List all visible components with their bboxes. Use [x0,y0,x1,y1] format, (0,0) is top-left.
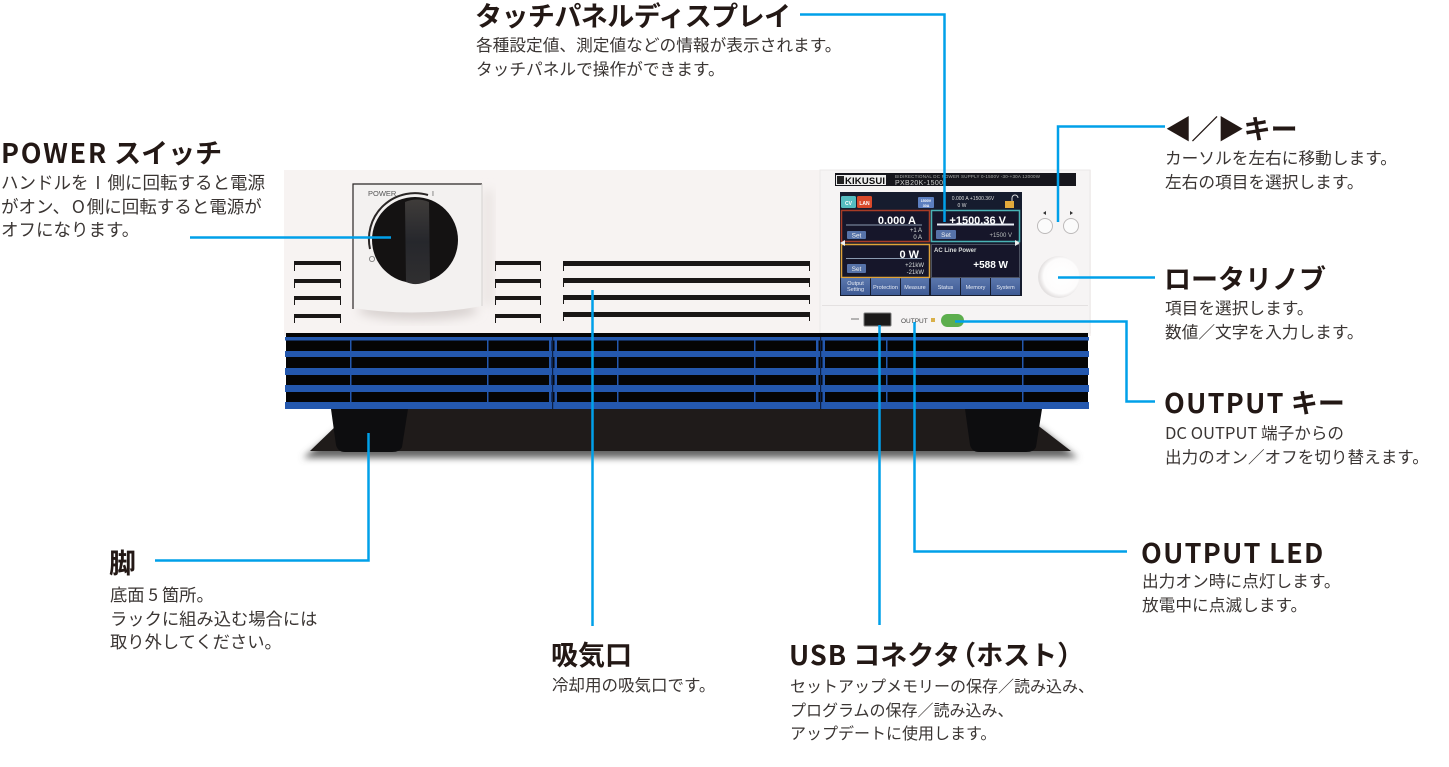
touch screen [840,192,1022,296]
screen tabs: System [996,285,1015,291]
USB connector [851,313,891,326]
AC line power box: AC Line Power [934,248,977,254]
screen tabs: Measure [904,285,926,291]
current box: +1 A [910,228,922,234]
blue louvers [285,333,1089,409]
callout: rotary knob: 数値／文字を入力します。 [1165,319,1364,343]
touch screen: 0 W [958,203,967,209]
callout: POWER switch: ハンドルを I 側に回転すると電源 [1,170,265,195]
power box [842,244,930,278]
AC line power box [932,244,1020,278]
middle vents [495,261,541,323]
model header strip: BIDIRECTIONAL DC POWER SUPPLY 0-1500V -30-+30A 12000W [895,174,1041,179]
leader lines [155,14,1165,626]
power switch plate: POWER [368,189,397,198]
callout: POWER switch: POWER スイッチ [1,132,222,171]
left foot [331,409,408,452]
power box: Set [852,266,862,273]
screen tabs [841,278,1020,295]
power switch plate: I [432,191,434,198]
model header strip [835,173,1076,187]
power switch plate [353,184,493,320]
model header strip: KIKUSUI [845,176,885,187]
power box: +21kW [905,263,924,269]
callout: foot: 取り外してください。 [110,628,282,653]
voltage box: +1500 V [989,233,1012,239]
callout: POWER switch: がオン、 O 側に回転すると電源が [1,194,262,219]
touch screen: 30A [923,204,930,208]
power box: 0 W [899,249,920,261]
callout: OUTPUT key: OUTPUT キー [1164,382,1345,421]
callout: touch panel: 各種設定値、測定値などの情報が表示されます。 [476,32,841,56]
left vents [294,261,341,323]
screen tabs: Output [847,281,864,287]
callout: rotary knob: ロータリノブ [1164,258,1326,297]
callout: USB connector [789,634,1094,744]
callout: foot: ラックに組み込む場合には [110,605,317,630]
callout: air intake [551,634,715,696]
callout: foot [109,542,317,653]
touch screen: CV [845,201,853,207]
callout: rotary knob [1164,258,1364,343]
air intake vents [563,261,810,321]
callout: touch panel: タッチパネルで操作ができます。 [476,56,725,80]
callout: USB connector: プログラムの保存／読み込み、 [790,697,1014,721]
callout: rotary knob: 項目を選択します。 [1165,295,1314,319]
screen tabs: Setting [847,287,864,293]
voltage box: Set [941,232,951,239]
callout: POWER switch [1,132,265,242]
current box: Set [852,232,862,240]
voltage box: +1500.36 V [949,215,1007,227]
AC line power box: +588 W [973,260,1009,271]
callout: air intake: 冷却用の吸気口です。 [552,672,715,696]
current box [842,210,930,242]
callout: OUTPUT LED [1141,532,1341,616]
arrow keys [1038,211,1078,234]
callout: OUTPUT LED: 出力オン時に点灯します。 [1142,568,1341,592]
touch screen: LAN [859,201,870,207]
right foot [965,409,1042,452]
screen tabs: Status [938,285,954,291]
rotary knob [1038,256,1080,298]
output label and LED: OUTPUT [901,318,928,325]
callout: air intake: 吸気口 [551,634,632,673]
callout: foot: 脚 [109,542,136,581]
screen tabs: Memory [966,285,986,291]
callout: foot: 底面 5 箇所。 [110,581,214,606]
floor shadow [303,409,1078,458]
callout: OUTPUT key [1164,382,1429,468]
callout: arrow keys [1165,108,1397,193]
callout: USB connector: セットアップメモリーの保存／読み込み、 [790,673,1094,697]
callout: OUTPUT LED: OUTPUT LED [1141,532,1325,571]
touch screen: 1500V [921,199,932,203]
callout: touch panel [475,0,841,80]
model header strip: PXB20K-1500 [895,180,943,187]
callout: arrow keys: 左右の項目を選択します。 [1165,169,1364,193]
voltage box [932,210,1020,242]
output key [941,314,964,327]
callout: arrow keys: カーソルを左右に移動します。 [1165,145,1397,169]
callout: OUTPUT key: 出力のオン／オフを切り替えます。 [1165,444,1429,468]
screen tabs: Protection [873,285,898,291]
callout: USB connector: アップデートに使用します。 [790,720,996,744]
callout: arrow keys: ◀／▶キー [1165,108,1298,147]
current box: 0 A [913,235,922,241]
chassis front panel [284,170,1091,336]
callout: USB connector: USB コネクタ（ホスト） [789,634,1084,673]
touch screen: 0.000 A +1500.36V [952,196,995,202]
callout: OUTPUT LED: 放電中に点滅します。 [1142,592,1307,616]
current box: 0.000 A [878,215,916,227]
knob [372,197,458,284]
callout: OUTPUT key: DC OUTPUT 端子からの [1165,420,1344,444]
callout: POWER switch: オフになります。 [1,217,139,242]
power box: -21kW [907,270,924,276]
